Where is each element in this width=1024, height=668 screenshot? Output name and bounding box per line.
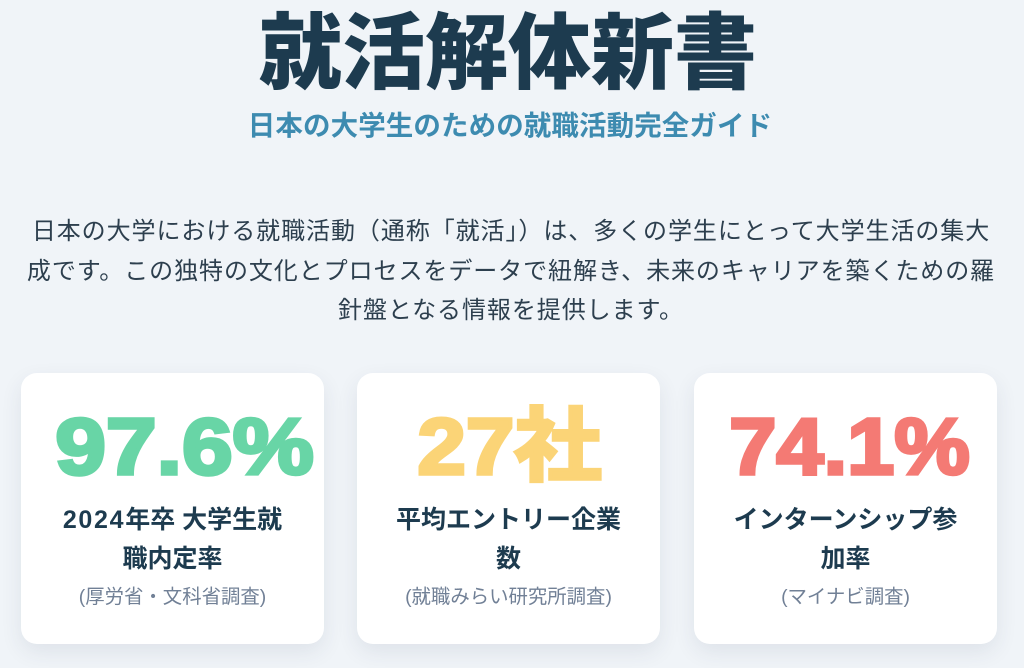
panel: entry count (357, 373, 660, 644)
subtitle: 日本の大学生のための就職活動完全ガイド (248, 110, 772, 141)
intro text (27, 218, 995, 324)
label: entry count: 数 (496, 544, 521, 572)
label: employment rate: 職内定率 (122, 544, 222, 572)
title: 就活解体新書 (259, 7, 757, 100)
intro text: 日本の大学における就職活動（通称「就活」）は、多くの学生にとって大学生活の集大 (32, 218, 990, 245)
panel: internship rate (694, 373, 997, 644)
label: entry count: 平均エントリー企業 (396, 506, 621, 534)
intro text: 成です。この独特の文化とプロセスをデータで紐解き、未来のキャリアを築くための羅 (27, 258, 995, 284)
source: entry count: (就職みらい研究所調査) (405, 586, 612, 608)
label: entry count (396, 506, 621, 572)
stat: 27 companies: 27社 (417, 402, 602, 491)
intro text: 針盤となる情報を提供します。 (338, 297, 684, 324)
label: internship rate: インターンシップ参 (734, 506, 957, 534)
stat: 74.1%: 74.1% (729, 402, 970, 491)
source: internship rate: (マイナビ調査) (781, 586, 910, 608)
source: employment rate: (厚労省・文科省調査) (79, 586, 266, 608)
stat: 97.6%: 97.6% (55, 402, 314, 491)
label: internship rate: 加率 (820, 544, 870, 572)
label: internship rate (734, 506, 957, 572)
label: employment rate (63, 506, 282, 572)
panel: employment rate (21, 373, 324, 644)
label: employment rate: 2024年卒 大学生就 (63, 506, 282, 534)
